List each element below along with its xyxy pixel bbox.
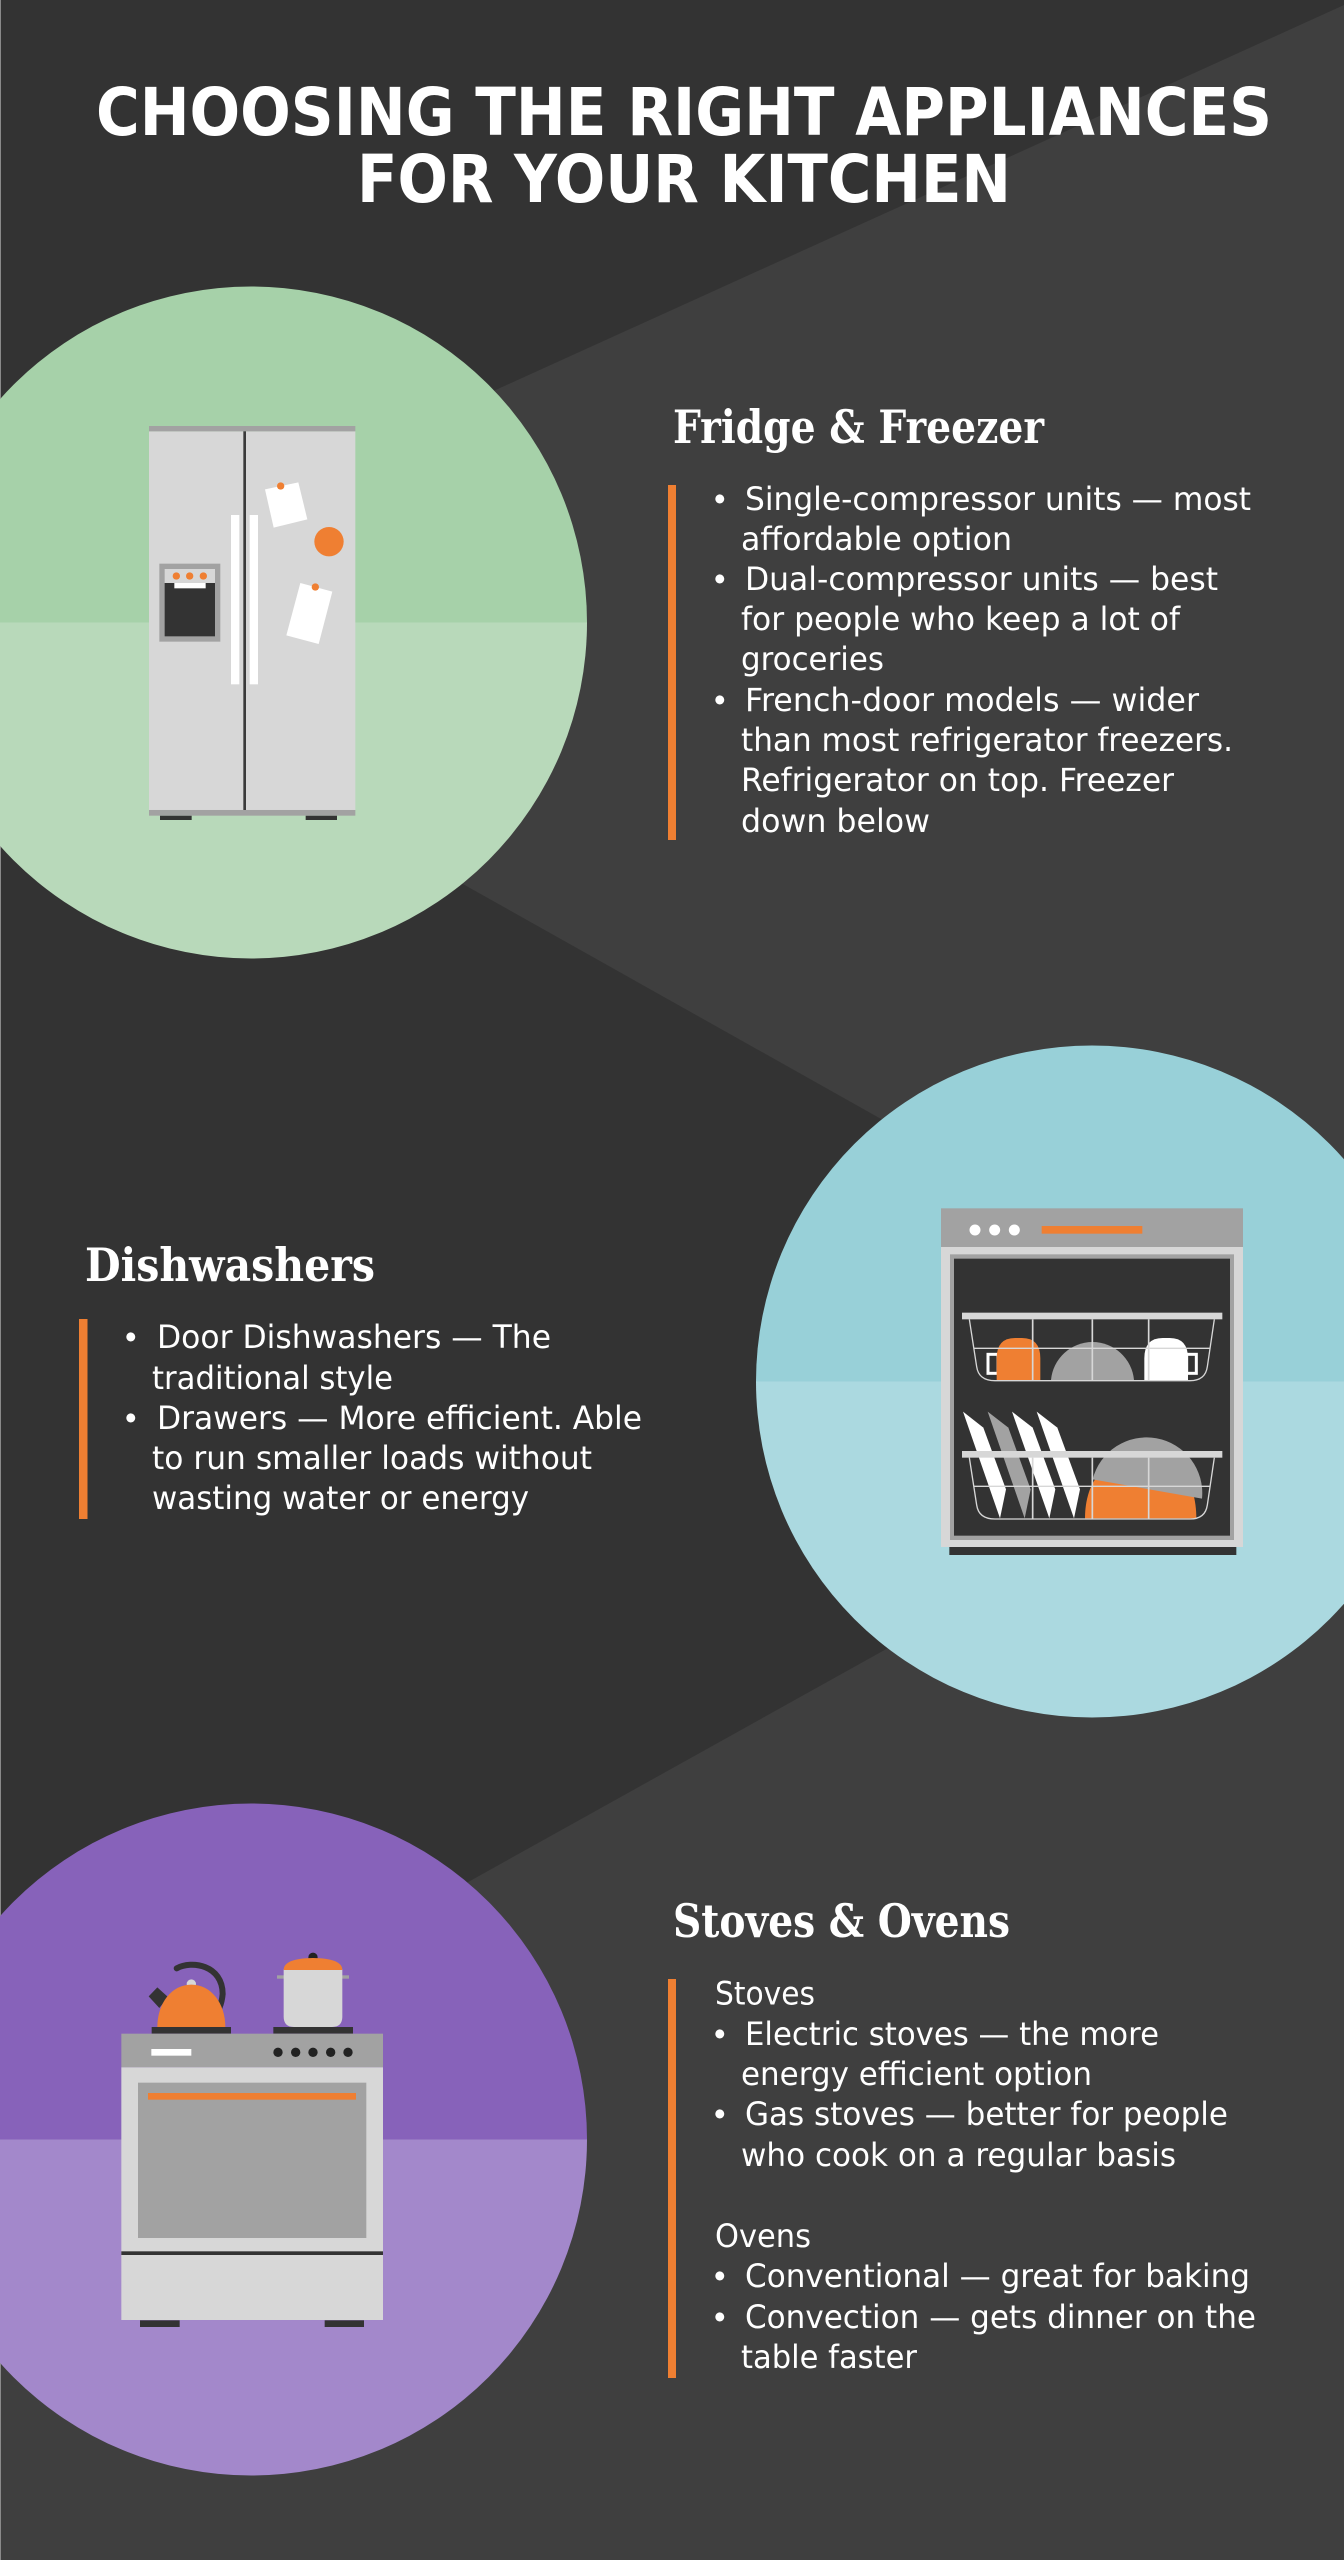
text block: fridge list: Single-compressor units — most	[745, 480, 1251, 518]
heading: dishwashers: Dishwashers	[85, 1238, 375, 1292]
orange accent bar	[668, 1979, 676, 2378]
heading: fridge and freezer: Fridge & Freezer	[673, 400, 1045, 454]
icon: kettle	[149, 1965, 225, 2027]
text block: fridge list: down below	[741, 802, 930, 840]
text block: fridge list: •	[714, 560, 726, 597]
panel: dishwashers circle	[756, 1046, 1344, 1718]
text block: stoves and ovens list: Electric stoves — the more	[745, 2015, 1159, 2053]
text block: stoves and ovens list: •	[714, 2257, 726, 2294]
text block: fridge list: French-door models — wider	[745, 681, 1200, 719]
text block: stoves and ovens list: who cook on a regular basis	[741, 2136, 1176, 2174]
text block: fridge list: •	[714, 480, 726, 517]
text block: dishwasher list: •	[125, 1399, 137, 1436]
panel: fridge and freezer text	[668, 400, 1251, 840]
panel: stoves and ovens text	[668, 1894, 1256, 2378]
text block: fridge list: Refrigerator on top. Freezer	[741, 761, 1175, 799]
text block: stoves and ovens list: table faster	[741, 2338, 918, 2376]
text block: stoves and ovens list: energy efficient option	[741, 2055, 1092, 2093]
text block: fridge list: Dual-compressor units — best	[745, 560, 1218, 598]
lower wire rack	[962, 1451, 1222, 1519]
text block: fridge list: than most refrigerator freezers.	[741, 721, 1233, 759]
text block: fridge list: affordable option	[741, 520, 1012, 558]
upper rack dishes	[988, 1338, 1196, 1380]
panel: dishwashers text	[79, 1238, 642, 1519]
text block: dishwasher list: to run smaller loads without	[152, 1439, 592, 1477]
text block: stoves and ovens list: •	[714, 2095, 726, 2132]
text block: stoves and ovens list: Ovens	[715, 2217, 811, 2255]
text block: fridge list: for people who keep a lot of	[741, 600, 1181, 638]
icon: cooking pot	[277, 1953, 349, 2027]
heading: stoves and ovens: Stoves & Ovens	[673, 1894, 1010, 1948]
panel: stoves and ovens circle	[0, 1804, 587, 2476]
panel: fridge and freezer circle	[0, 287, 587, 959]
text block: dishwasher list: •	[125, 1318, 137, 1355]
text block: dishwasher list: Door Dishwashers — The	[157, 1318, 551, 1356]
text block: stoves and ovens list: Stoves	[715, 1974, 815, 2012]
icon: refrigerator	[149, 426, 355, 820]
text block: stoves and ovens list: Gas stoves — better for people	[745, 2095, 1228, 2133]
text block: stoves and ovens list: •	[714, 2015, 726, 2052]
icon: stove top with kettle and pot	[121, 1953, 383, 2067]
text block: dishwasher list	[125, 1318, 642, 1517]
upper wire rack	[962, 1313, 1222, 1381]
text block: stoves and ovens list	[714, 1974, 1256, 2376]
lower rack dishes	[963, 1412, 1202, 1518]
text block: dishwasher list: wasting water or energy	[152, 1479, 529, 1517]
title	[96, 74, 1272, 218]
text block: stoves and ovens list: Conventional — great for baking	[745, 2257, 1250, 2295]
orange accent bar	[79, 1319, 88, 1519]
text block: fridge list: groceries	[741, 640, 884, 678]
text block: fridge list: •	[714, 681, 726, 718]
orange accent bar	[668, 485, 676, 840]
text block: stoves and ovens list: •	[714, 2298, 726, 2335]
icon: oven body	[121, 2067, 383, 2327]
text block: fridge list	[714, 480, 1251, 840]
text block: dishwasher list: traditional style	[152, 1359, 393, 1397]
text block: stoves and ovens list: Convection — gets dinner on the	[745, 2298, 1256, 2336]
text block: dishwasher list: Drawers — More efficient. Able	[157, 1399, 642, 1437]
title: FOR YOUR KITCHEN	[357, 141, 1011, 218]
icon: dishwasher	[941, 1208, 1243, 1555]
